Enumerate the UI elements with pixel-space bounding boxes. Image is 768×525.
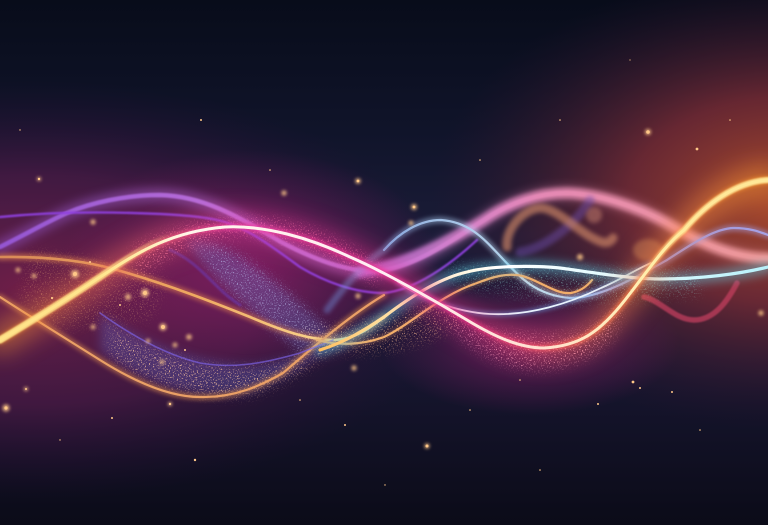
- wave: blue ribbon: [327, 220, 768, 314]
- ribbon: purple and pink upper wave: [0, 193, 768, 305]
- wave: thin yellow line: [0, 257, 384, 340]
- ribbon: dusty blue band and particle fields: [20, 217, 700, 397]
- wave: lower orange line: [0, 275, 592, 397]
- ribbon: orange loop and blurred blobs: [507, 200, 737, 320]
- wave: white and cyan line: [320, 266, 768, 350]
- wave: main bright line: [0, 180, 768, 348]
